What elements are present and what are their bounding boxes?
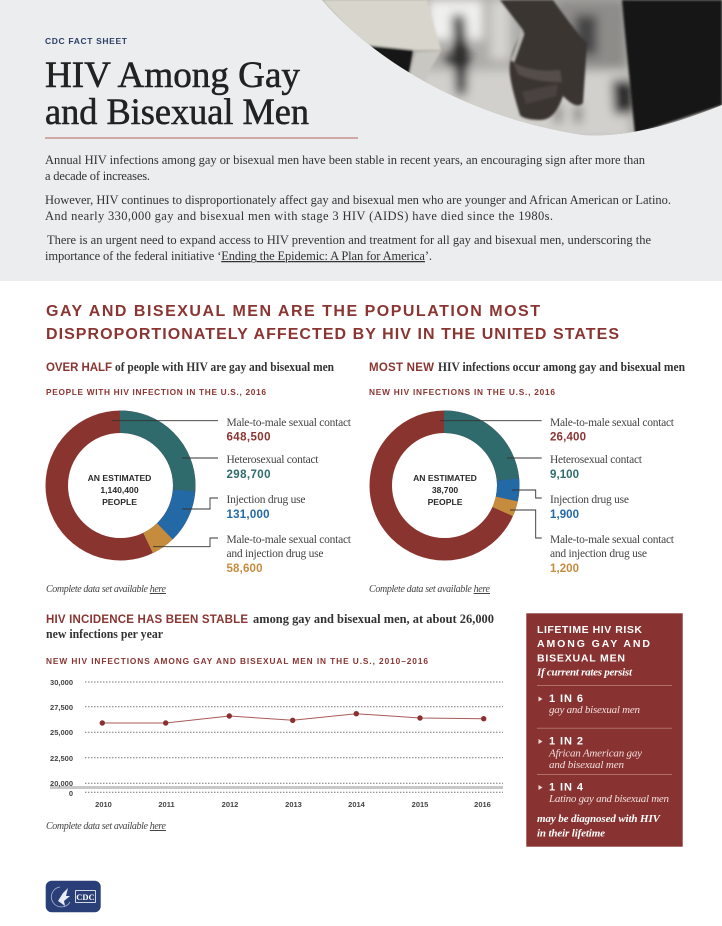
- stat: 1 in 6: gay and bisexual men: [549, 704, 640, 716]
- y axis labels: [50, 678, 73, 798]
- grid lines: [85, 682, 503, 792]
- donut center text: AN ESTIMATED: [88, 473, 151, 483]
- x axis labels: [95, 800, 491, 809]
- x axis labels: 2014: [348, 800, 366, 809]
- legend: injection: [550, 494, 629, 521]
- donut center text: PEOPLE: [428, 497, 463, 507]
- stat: 1 in 2: [538, 735, 642, 771]
- intro text: Annual HIV infections among gay or bisexual men have been stable in recent years, an encouraging sign after more than: [45, 153, 646, 167]
- data note: Complete data set available here: [46, 584, 167, 595]
- data points: [100, 711, 486, 726]
- x axis labels: 2011: [158, 800, 175, 809]
- chart label: PEOPLE WITH HIV INFECTION IN THE U.S., 2016: [46, 387, 266, 397]
- stat: 1 in 4: 1 IN 4: [549, 782, 584, 794]
- section heading: GAY AND BISEXUAL MEN ARE THE POPULATION MOST: [46, 303, 540, 320]
- heading: incidence stable: among gay and bisexual men, at about 26,000: [253, 612, 494, 626]
- legend: both: [226, 534, 352, 575]
- heading: incidence stable: [46, 612, 494, 641]
- line chart: [50, 678, 503, 809]
- title rule: [45, 138, 358, 139]
- legend: heterosexual: Heterosexual contact: [226, 454, 319, 466]
- x axis labels: 2013: [285, 800, 302, 809]
- intro text: There is an urgent need to expand access to HIV prevention and treatment for all gay and bisexual men, underscoring the: [47, 233, 651, 247]
- legend: male-to-male: [226, 417, 352, 444]
- panel footer: in their lifetime: [537, 828, 605, 840]
- heading: incidence stable: new infections per year: [46, 627, 163, 641]
- panel: lifetime risk: [526, 613, 683, 847]
- legend: injection: 131,000: [226, 509, 270, 521]
- dividers: [537, 686, 672, 774]
- data line: [102, 714, 484, 723]
- panel heading: AMONG GAY AND: [537, 638, 650, 650]
- legend: heterosexual: 9,100: [550, 469, 579, 481]
- icon: CDC logo: [46, 881, 101, 912]
- legend: both: and injection drug use: [550, 548, 647, 560]
- panel heading: LIFETIME HIV RISK: [537, 624, 642, 636]
- legend: male-to-male: 26,400: [550, 432, 586, 444]
- donut center text: AN ESTIMATED: [413, 473, 477, 483]
- legend: injection: 1,900: [550, 509, 579, 521]
- heading: incidence stable: HIV INCIDENCE HAS BEEN STABLE: [46, 614, 248, 626]
- legend: male-to-male: 648,500: [226, 432, 270, 444]
- legend: injection: [226, 494, 306, 521]
- legend: heterosexual: Heterosexual contact: [550, 454, 643, 466]
- y axis labels: 30,000: [50, 678, 73, 687]
- panel heading: [537, 624, 650, 665]
- intro text: And nearly 330,000 gay and bisexual men with stage 3 HIV (AIDS) have died since the 1980s.: [45, 209, 553, 223]
- stat: 1 in 6: [538, 693, 640, 716]
- x axis labels: 2015: [412, 800, 428, 809]
- title: [45, 55, 309, 133]
- legend: heterosexual: [226, 454, 319, 481]
- donut center text: [413, 473, 477, 507]
- leader lines: [112, 421, 218, 547]
- subheading: most new: MOST NEW: [369, 362, 434, 374]
- section heading: DISPROPORTIONATELY AFFECTED BY HIV IN THE UNITED STATES: [46, 326, 619, 343]
- icon: CDC logo: CDC: [76, 892, 95, 902]
- subheading: most new: HIV infections occur among gay and bisexual men: [438, 360, 685, 374]
- photo: two people holding hands: [320, 0, 722, 140]
- stat: 1 in 2: African American gay: [548, 748, 642, 760]
- legend: both: [550, 534, 675, 575]
- y axis labels: 0: [69, 789, 73, 798]
- y axis labels: 20,000: [50, 779, 73, 788]
- title: and Bisexual Men: [45, 92, 309, 133]
- panel heading: BISEXUAL MEN: [537, 653, 625, 665]
- legend: both: Male-to-male sexual contact: [550, 534, 675, 546]
- x axis labels: 2012: [222, 800, 238, 809]
- donut center text: [88, 473, 151, 507]
- chart label: NEW HIV INFECTIONS IN THE U.S., 2016: [369, 387, 555, 397]
- chart label: NEW HIV INFECTIONS AMONG GAY AND BISEXUAL MEN IN THE U.S., 2010–2016: [46, 656, 428, 666]
- legend: male-to-male: Male-to-male sexual contact: [226, 417, 352, 429]
- subheading: over half: OVER HALF: [46, 362, 112, 374]
- data note: Complete data set available here: [46, 821, 167, 832]
- x axis labels: 2010: [95, 800, 112, 809]
- panel: new infections: [369, 360, 685, 595]
- legend: heterosexual: 298,700: [226, 469, 270, 481]
- subheading: over half: of people with HIV are gay and bisexual men: [115, 360, 334, 374]
- intro text: [45, 153, 671, 263]
- intro text: a decade of increases.: [45, 169, 150, 183]
- legend: injection: Injection drug use: [226, 494, 306, 506]
- donut chart: new infections: [381, 422, 508, 549]
- data note: Complete data set available here: [369, 584, 491, 595]
- legend: male-to-male: Male-to-male sexual contact: [550, 417, 675, 429]
- y axis labels: 25,000: [50, 728, 73, 737]
- section heading: [46, 303, 619, 343]
- panel footer: may be diagnosed with HIV: [537, 813, 662, 825]
- axis break: [50, 786, 503, 789]
- panel background: [526, 613, 683, 847]
- stat: 1 in 2: 1 IN 2: [549, 735, 583, 747]
- legend: male-to-male: [550, 417, 675, 444]
- panel footer: [537, 813, 662, 840]
- legend: both: 58,600: [226, 563, 262, 575]
- legend: both: Male-to-male sexual contact: [226, 534, 352, 546]
- intro text: importance of the federal initiative ‘Ending the Epidemic: A Plan for America’.: [45, 249, 432, 263]
- stat: 1 in 2: and bisexual men: [549, 759, 624, 771]
- donut chart: people with HIV: [57, 422, 184, 549]
- stat: 1 in 4: [538, 782, 670, 805]
- legend: injection: Injection drug use: [550, 494, 629, 506]
- panel subheading: If current rates persist: [536, 667, 633, 679]
- donut center text: PEOPLE: [102, 497, 137, 507]
- donut center text: 1,140,400: [100, 485, 139, 495]
- legend: heterosexual: [550, 454, 643, 481]
- y axis labels: 27,500: [50, 703, 73, 712]
- y axis labels: 22,500: [50, 754, 73, 763]
- title: HIV Among Gay: [45, 55, 300, 96]
- x axis labels: 2016: [474, 800, 491, 809]
- donut center text: 38,700: [432, 485, 458, 495]
- legend: both: and injection drug use: [226, 548, 324, 560]
- stat: 1 in 6: 1 IN 6: [549, 693, 583, 705]
- legend: both: 1,200: [550, 563, 579, 575]
- header background: [0, 0, 722, 281]
- intro text: However, HIV continues to disproportionately affect gay and bisexual men who are younger and African American or Latino.: [45, 193, 671, 207]
- leader lines: [440, 421, 542, 538]
- stat: 1 in 4: Latino gay and bisexual men: [548, 793, 670, 805]
- panel: people with HIV: [46, 360, 352, 595]
- label: CDC fact sheet: CDC FACT SHEET: [45, 36, 128, 46]
